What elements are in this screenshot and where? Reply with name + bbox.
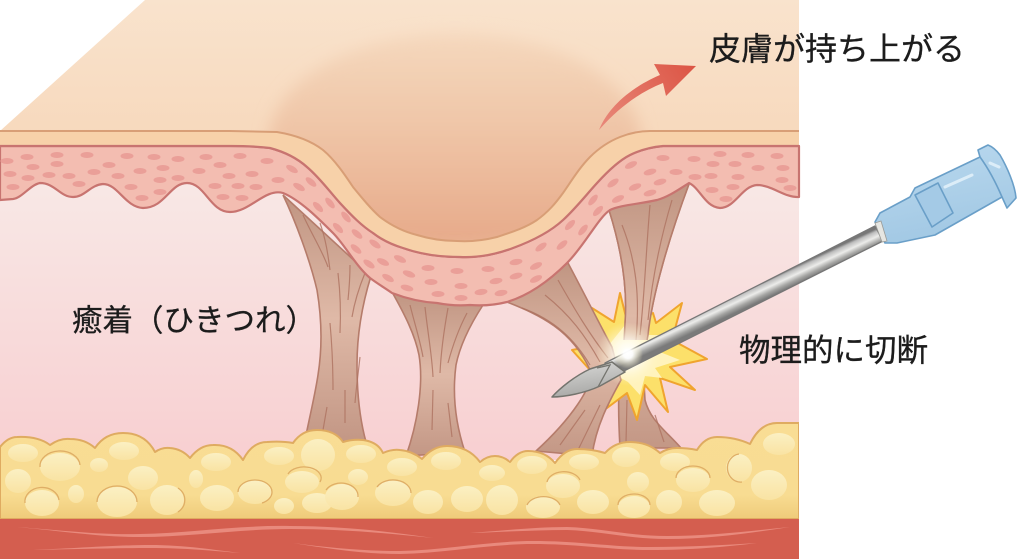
dermis cells xyxy=(0,151,796,301)
label: adhesion: 癒着（ひきつれ） xyxy=(72,304,316,338)
dermis layer xyxy=(0,146,799,305)
needle bevel face xyxy=(597,365,610,387)
arrow: skin lifts upward xyxy=(599,64,696,130)
needle hub xyxy=(875,145,1016,243)
muscle fibers xyxy=(17,526,790,554)
label: physical cut: 物理的に切断 xyxy=(739,332,928,368)
fiber 1 xyxy=(283,195,371,442)
glow highlight on the needle xyxy=(613,339,643,369)
needle bevel tip xyxy=(552,362,625,397)
fat cell outlines xyxy=(25,451,742,512)
hub highlights xyxy=(945,163,999,187)
diagonal fiber being cut xyxy=(507,263,621,456)
epidermis surface line xyxy=(0,131,799,241)
dermis background xyxy=(0,150,799,460)
needle collar xyxy=(875,221,887,242)
fat layer xyxy=(0,423,799,519)
fiber 4 xyxy=(609,184,689,448)
muscle layer xyxy=(0,519,799,559)
hub facet xyxy=(915,183,953,227)
dermis top line xyxy=(0,146,799,257)
central glow xyxy=(596,322,660,386)
hub body xyxy=(875,145,1016,243)
epidermis band xyxy=(0,131,799,257)
needle shaft xyxy=(605,226,883,380)
fiber 2 xyxy=(392,292,483,456)
fiber streaks xyxy=(303,200,672,450)
label: skin lifts: 皮膚が持ち上がる xyxy=(709,31,965,67)
adhesion fibers xyxy=(283,184,689,456)
spark burst at the cut xyxy=(572,293,707,420)
needle xyxy=(552,145,1016,397)
fat cells xyxy=(5,433,795,518)
upper part of fiber over the burst xyxy=(608,184,690,340)
hub rim line xyxy=(980,157,1002,197)
skin surface with raised bump xyxy=(0,0,799,250)
